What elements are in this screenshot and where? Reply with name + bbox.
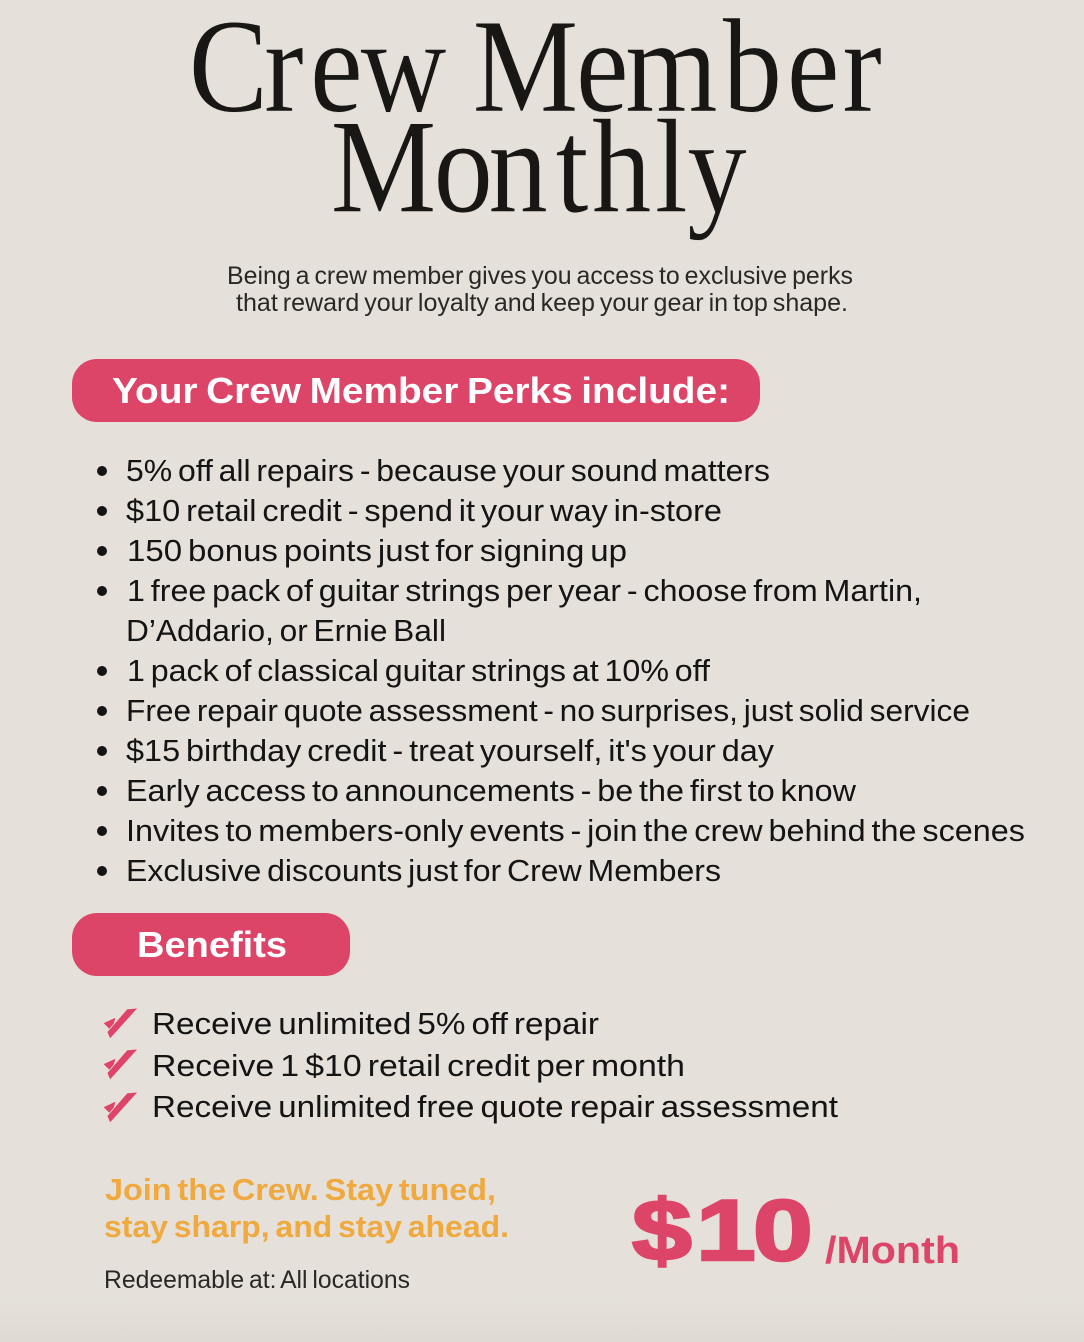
intro text: Being a crew member gives you access to exclusive perks [227, 262, 853, 290]
icon: check mark [103, 1049, 138, 1080]
benefits list: Receive unlimited 5% off repair [152, 1006, 599, 1041]
perks list: 1 pack of classical guitar strings at 10% off [127, 653, 710, 688]
perks list: 1 free pack of guitar strings per year - choose from Martin, [127, 573, 922, 608]
benefits list [103, 1006, 838, 1124]
perks list: Free repair quote assessment - no surprises, just solid service [126, 693, 970, 728]
icon: check mark [103, 1092, 138, 1123]
icon: check mark [103, 1008, 138, 1039]
heading: perks [72, 359, 760, 422]
benefits list: Receive unlimited free quote repair assessment [152, 1089, 838, 1124]
perks list: D’Addario, or Ernie Ball [126, 613, 446, 648]
perks list: 5% off all repairs - because your sound matters [126, 453, 770, 488]
title [189, 0, 882, 241]
intro text: that reward your loyalty and keep your gear in top shape. [236, 289, 848, 317]
intro text [227, 262, 853, 317]
price: /Month [825, 1230, 960, 1272]
title: Monthly [331, 93, 747, 241]
perks list: $10 retail credit - spend it your way in-store [126, 493, 722, 528]
perks list: Invites to members-only events - join the crew behind the scenes [126, 813, 1025, 848]
perks list [97, 453, 1025, 888]
price [632, 1182, 960, 1279]
call to action: Join the Crew. Stay tuned, [105, 1172, 496, 1207]
call to action: stay sharp, and stay ahead. [104, 1209, 509, 1244]
perks list: Early access to announcements - be the first to know [126, 773, 857, 808]
heading: benefits: Benefits [137, 924, 287, 965]
call to action [104, 1172, 509, 1244]
redemption note: Redeemable at: All locations [104, 1266, 410, 1294]
price: $10 [632, 1182, 813, 1279]
perks list: 150 bonus points just for signing up [127, 533, 627, 568]
heading: perks: Your Crew Member Perks include: [112, 370, 730, 411]
heading: benefits [72, 913, 350, 976]
benefits list: Receive 1 $10 retail credit per month [152, 1048, 685, 1083]
perks list: $15 birthday credit - treat yourself, it's your day [126, 733, 775, 768]
perks list: Exclusive discounts just for Crew Members [126, 853, 721, 888]
